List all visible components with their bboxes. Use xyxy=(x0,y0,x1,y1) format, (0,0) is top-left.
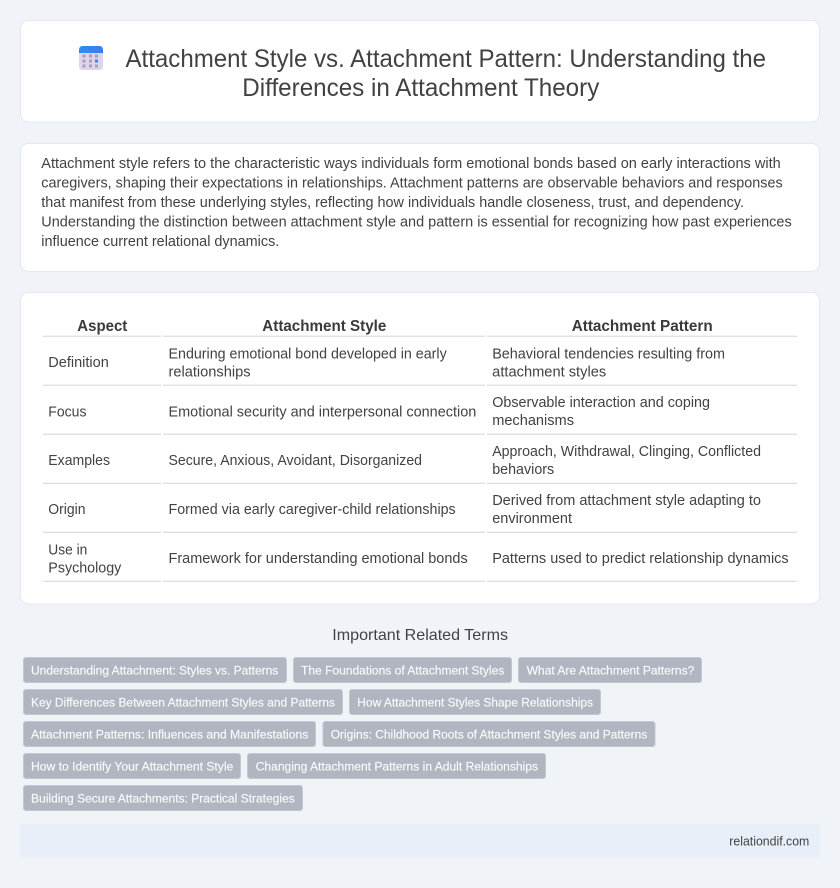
table row: Use in Psychology: Psychology xyxy=(48,560,122,576)
table row: Definition: attachment styles xyxy=(492,364,606,380)
table row: Origin xyxy=(48,493,761,527)
tag: Building Secure Attachments: Practical Strategies xyxy=(31,791,295,805)
title: Attachment Style vs. Attachment Pattern: Understanding the xyxy=(126,45,766,73)
text block: description: Attachment style refers to the characteristic ways individuals form emotional bonds based on early interactions with xyxy=(41,156,781,172)
tag xyxy=(24,722,316,746)
tag: Origins: Childhood Roots of Attachment Styles and Patterns xyxy=(331,727,647,741)
table row: Examples: behaviors xyxy=(492,462,554,478)
table row: Examples xyxy=(48,444,761,478)
tag: Understanding Attachment: Styles vs. Patterns xyxy=(31,663,278,677)
tag xyxy=(323,722,655,746)
tag xyxy=(24,658,286,682)
panel: related term tags xyxy=(24,658,702,810)
table row: Definition: Definition xyxy=(48,355,109,371)
table row: Origin: Derived from attachment style adapting to xyxy=(492,493,761,509)
table row: Focus: Focus xyxy=(48,404,86,420)
tag: The Foundations of Attachment Styles xyxy=(301,663,504,677)
tag xyxy=(248,754,546,778)
table row: Use in Psychology: Patterns used to predict relationship dynamics xyxy=(492,551,789,567)
tag: How to Identify Your Attachment Style xyxy=(31,759,234,773)
table row: Definition: Behavioral tendencies resulting from xyxy=(492,346,725,362)
panel: title header xyxy=(20,20,820,122)
table row: Origin: environment xyxy=(492,511,572,527)
table row: Focus: Emotional security and interpersonal connection xyxy=(168,404,476,420)
table row: Definition: relationships xyxy=(168,364,250,380)
tag xyxy=(24,690,342,714)
panel: description paragraph xyxy=(20,144,820,272)
table row: Use in Psychology: Framework for understanding emotional bonds xyxy=(168,551,468,567)
table row: Use in Psychology xyxy=(48,542,789,576)
table row: Examples: Secure, Anxious, Avoidant, Disorganized xyxy=(168,453,422,469)
tag xyxy=(24,786,302,810)
tag: Key Differences Between Attachment Styles and Patterns xyxy=(31,695,335,709)
tag: Attachment Patterns: Influences and Manifestations xyxy=(31,727,308,741)
tag xyxy=(350,690,600,714)
text block: description: influence current relational dynamics. xyxy=(41,234,279,250)
table row: Focus: Observable interaction and coping xyxy=(492,395,710,411)
tag: How Attachment Styles Shape Relationships xyxy=(357,695,593,709)
title xyxy=(126,45,766,102)
title: Differences in Attachment Theory xyxy=(242,74,600,102)
table header row: Attachment Style xyxy=(262,318,386,335)
tag: What Are Attachment Patterns? xyxy=(527,663,695,677)
text block: description: Understanding the distinction between attachment style and pattern is essential for recognizing how past experiences xyxy=(41,214,792,230)
table row: Origin: Formed via early caregiver-child relationships xyxy=(168,502,456,518)
table row: Origin: Origin xyxy=(48,502,86,518)
text block: description: caregivers, shaping their expectations in relationships. Attachment patterns are observable behaviors and responses xyxy=(41,176,783,192)
table row: Definition xyxy=(48,346,725,380)
table row: Examples: Approach, Withdrawal, Clinging, Conflicted xyxy=(492,444,761,460)
text block: description xyxy=(41,156,792,250)
tag xyxy=(518,658,702,682)
footer source text: relationdif.com xyxy=(729,833,809,848)
text block: description: that manifest from these underlying styles, reflecting how individuals handle closeness, trust, and dependency. xyxy=(41,195,744,211)
table row: Focus: mechanisms xyxy=(492,413,574,429)
footer bar xyxy=(20,824,820,858)
tag xyxy=(294,658,512,682)
table header row: Attachment Pattern xyxy=(572,318,713,335)
icon: calendar xyxy=(79,46,103,70)
table row: Examples: Examples xyxy=(48,453,110,469)
table row: Definition: Enduring emotional bond developed in early xyxy=(168,346,447,362)
table row: Focus xyxy=(48,395,710,429)
table header row: Aspect xyxy=(77,318,128,335)
tag xyxy=(24,754,240,778)
table row: Use in Psychology: Use in xyxy=(48,542,87,558)
panel: comparison table xyxy=(20,292,820,604)
tag: Changing Attachment Patterns in Adult Relationships xyxy=(256,759,538,773)
heading: Important Related Terms: Important Related Terms xyxy=(332,627,508,644)
table header row xyxy=(77,318,713,335)
